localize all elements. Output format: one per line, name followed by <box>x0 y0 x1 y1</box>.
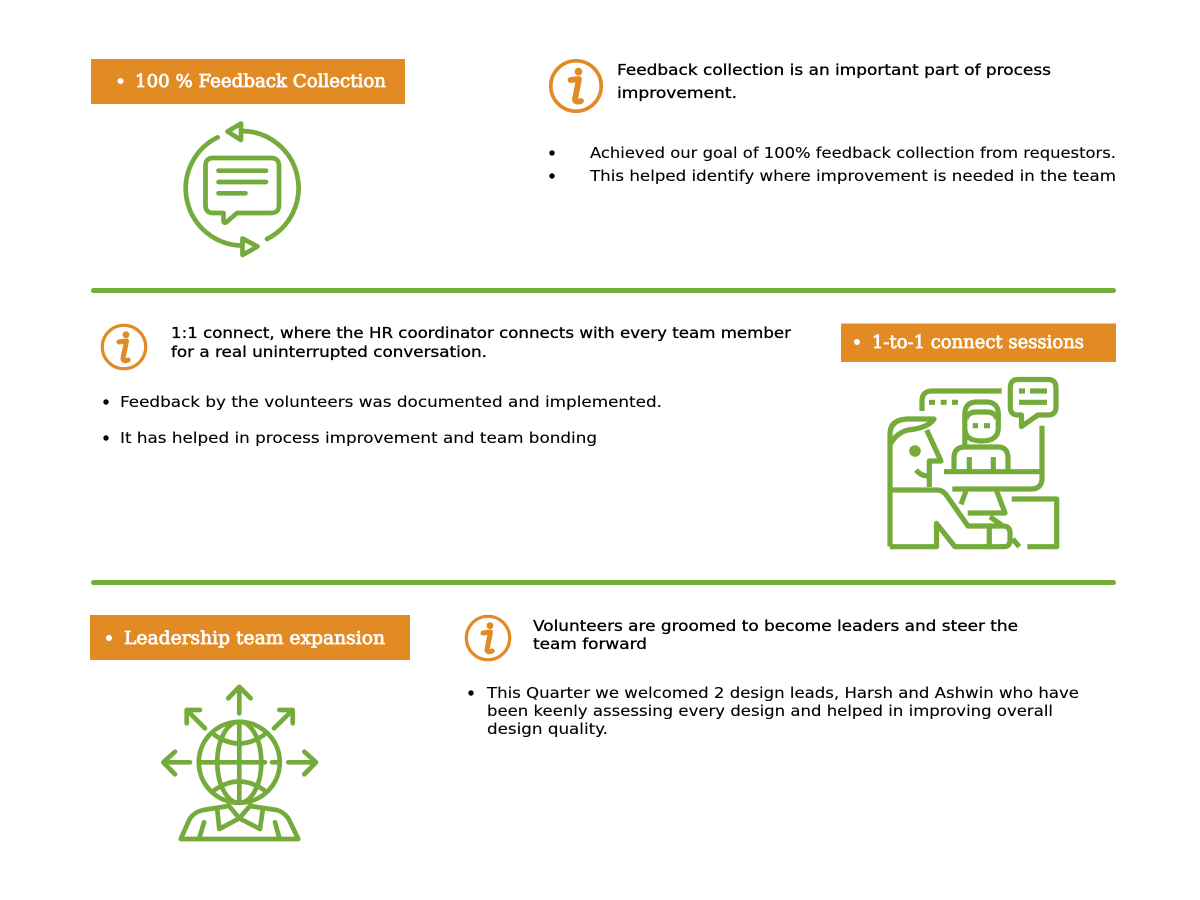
callout: volunteers statement: team forward <box>533 635 647 653</box>
bullet list: feedback results <box>549 144 1116 185</box>
bullet list: feedback results: This helped identify where improvement is needed in the team <box>589 167 1116 185</box>
icon: video call between two people <box>890 380 1057 547</box>
callout: feedback collection statement: Feedback collection is an important part of process <box>617 61 1051 79</box>
bullet list: connect outcomes: Feedback by the volunteers was documented and implemented. <box>120 393 662 411</box>
icon: info <box>551 61 601 111</box>
heading: Leadership team expansion: Leadership team expansion <box>124 629 385 649</box>
callout: 1:1 connect statement <box>171 324 792 361</box>
icon: info <box>466 616 510 660</box>
callout: 1:1 connect statement: 1:1 connect, where the HR coordinator connects with every team member <box>171 324 792 342</box>
callout: feedback collection statement: improvement. <box>617 84 737 102</box>
bullet list: connect outcomes <box>103 393 662 447</box>
callout: 1:1 connect statement: for a real uninterrupted conversation. <box>171 343 487 361</box>
panel: 100% feedback collection <box>91 59 1116 255</box>
callout: feedback collection statement <box>617 61 1051 102</box>
heading: Leadership team expansion <box>90 615 410 660</box>
bullet text: new design leads <box>468 684 1079 738</box>
panel: leadership team expansion <box>90 615 1079 839</box>
heading: 100 % Feedback Collection: 100 % Feedback Collection <box>135 72 386 92</box>
heading: 1-to-1 connect sessions <box>841 324 1116 362</box>
bullet list: feedback results: Achieved our goal of 100% feedback collection from requestors. <box>590 144 1116 162</box>
icon: info <box>102 325 146 369</box>
icon: globe head with outward arrows <box>163 687 316 839</box>
callout: volunteers statement <box>533 617 1018 653</box>
panel: 1-to-1 connect sessions <box>102 324 1116 547</box>
heading: 100 % Feedback Collection <box>91 59 405 104</box>
icon: feedback loop speech bubble <box>186 124 299 255</box>
callout: volunteers statement: Volunteers are groomed to become leaders and steer the <box>533 617 1018 635</box>
bullet text: new design leads: been keenly assessing every design and helped in improving overall <box>487 702 1053 720</box>
bullet list: connect outcomes: It has helped in process improvement and team bonding <box>120 429 597 447</box>
bullet text: new design leads: design quality. <box>487 720 608 738</box>
heading: 1-to-1 connect sessions: 1-to-1 connect sessions <box>872 333 1084 353</box>
bullet text: new design leads: This Quarter we welcomed 2 design leads, Harsh and Ashwin who have <box>486 684 1079 702</box>
